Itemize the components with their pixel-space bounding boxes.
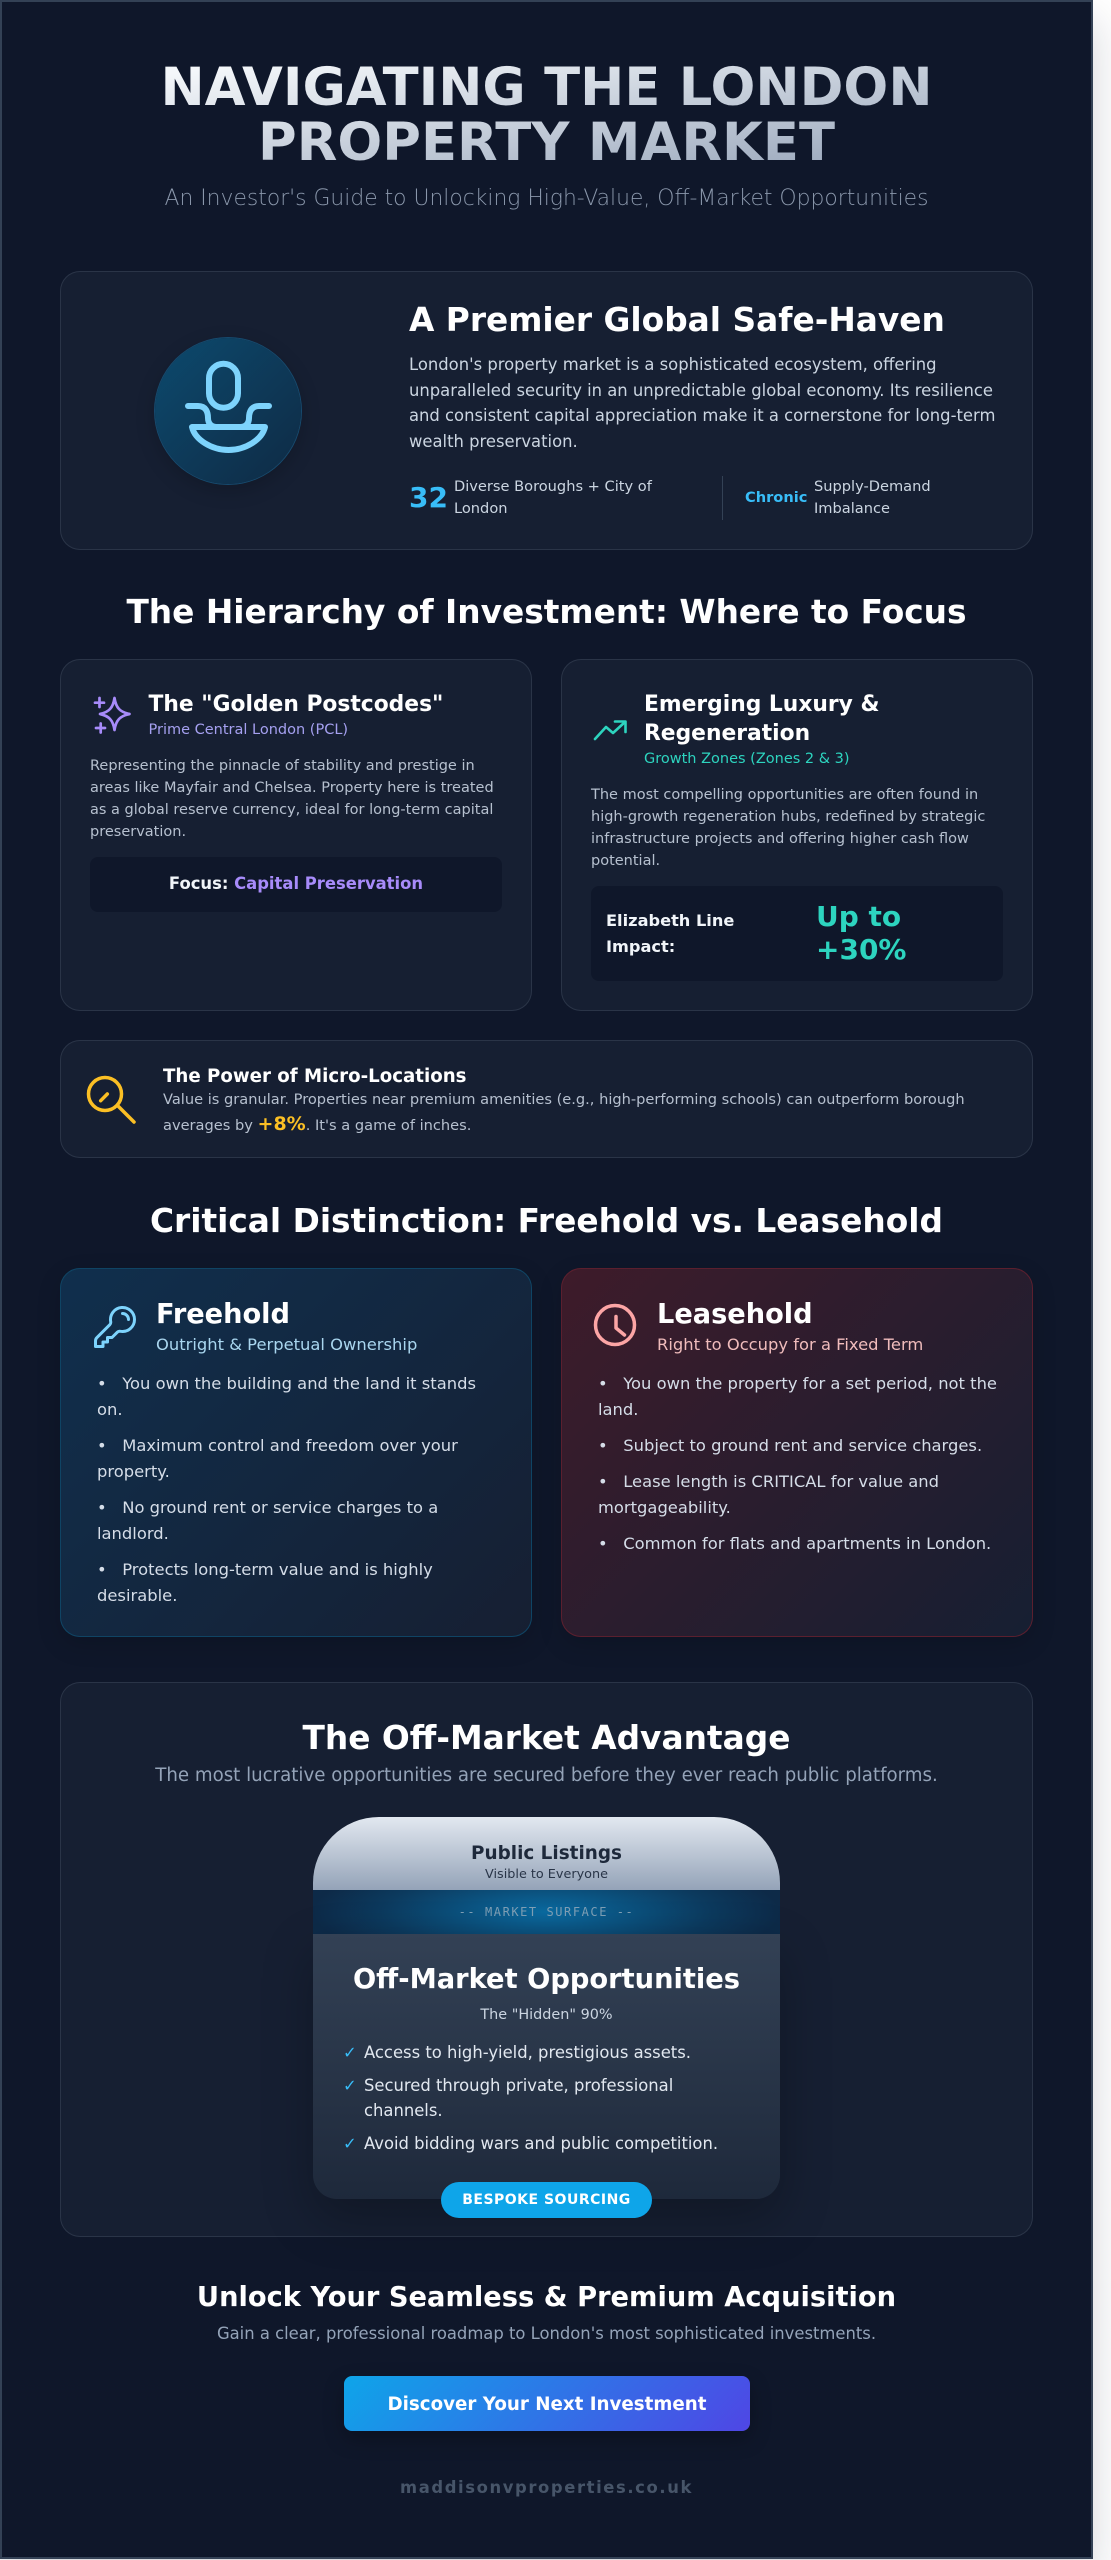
text: emerging description: The most compelling opportunities are often found in <box>591 787 978 803</box>
layer: public listings: Public Listings <box>471 1842 622 1864</box>
divider <box>722 476 723 520</box>
icon: trending up <box>594 720 627 740</box>
list: off-market benefits: ✓ <box>343 2043 357 2062</box>
stat: boroughs: 32 <box>409 481 448 514</box>
list: off-market benefits: Secured through private, professional <box>364 2076 673 2095</box>
heading: emerging luxury: Regeneration <box>644 721 810 746</box>
list: leasehold points: land. <box>598 1400 638 1419</box>
diagram: market iceberg <box>313 1817 780 2218</box>
button: discover: Discover Your Next Investment <box>388 2394 706 2415</box>
text: golden postcodes description: preservation. <box>90 824 186 840</box>
stat: boroughs: Diverse Boroughs + City of <box>454 478 652 495</box>
heading: safe haven: A Premier Global Safe-Haven <box>409 301 945 339</box>
layer: market surface: -- MARKET SURFACE -- <box>459 1905 634 1919</box>
heading: freehold vs leasehold: Critical Distinction: Freehold vs. Leasehold <box>150 1202 943 1240</box>
list: freehold points: • No ground rent or service charges to a <box>97 1498 438 1517</box>
layer: off-market opportunities <box>313 1934 780 2199</box>
badge: bespoke sourcing: BESPOKE SOURCING <box>462 2192 631 2208</box>
list: leasehold points: • Lease length is CRITICAL for value and <box>598 1472 939 1491</box>
panel: micro-locations <box>60 1040 1033 1158</box>
footer: website: maddisonvproperties.co.uk <box>400 2478 693 2497</box>
title <box>100 60 993 170</box>
list: leasehold points <box>598 1374 997 1553</box>
icon: key <box>94 1306 136 1348</box>
text: safe haven description: and consistent capital appreciation make it a cornerstone for long-term <box>409 406 995 425</box>
subtitle: An Investor's Guide to Unlocking High-Value, Off-Market Opportunities <box>164 186 928 211</box>
icon: safe haven emblem <box>154 337 302 485</box>
text: golden postcodes description: as a global reserve currency, ideal for long-term capital <box>90 802 493 818</box>
list: freehold points: on. <box>97 1400 123 1419</box>
panel: safe haven <box>60 271 1033 550</box>
heading: emerging luxury: Emerging Luxury & <box>644 692 879 716</box>
stat: chronic imbalance: Imbalance <box>814 500 890 517</box>
text: golden postcodes description <box>90 758 494 840</box>
stat: boroughs <box>409 478 652 517</box>
text: safe haven description: wealth preservation. <box>409 432 578 451</box>
text: call to action: Gain a clear, professional roadmap to London's most sophisticated investments. <box>217 2324 876 2343</box>
list: freehold points: • Protects long-term value and is highly <box>97 1560 433 1579</box>
callout: focus <box>90 857 502 912</box>
list: freehold points: landlord. <box>97 1524 169 1543</box>
list: freehold points: property. <box>97 1462 170 1481</box>
callout: focus: Focus: Capital Preservation <box>169 874 423 893</box>
badge: bespoke sourcing <box>441 2182 652 2218</box>
text: emerging description: infrastructure projects and offering higher cash flow <box>591 831 969 847</box>
list: leasehold points: • Common for flats and apartments in London. <box>598 1534 991 1553</box>
subheading: off-market advantage: The most lucrative opportunities are secured before they ever reach public platforms. <box>155 1765 938 1786</box>
heading: call to action: Unlock Your Seamless & Premium Acquisition <box>197 2282 896 2313</box>
title: NAVIGATING THE LONDON <box>160 57 932 118</box>
list: freehold points: • You own the building and the land it stands <box>97 1374 476 1393</box>
icon: sparkles <box>94 696 131 734</box>
heading: hierarchy: The Hierarchy of Investment: Where to Focus <box>126 592 967 630</box>
callout: elizabeth line impact: Impact: <box>606 937 675 956</box>
heading: off-market opportunities: Off-Market Opportunities <box>353 1964 740 1994</box>
list: off-market benefits: ✓ <box>343 2134 357 2153</box>
list: leasehold points: • Subject to ground rent and service charges. <box>598 1436 982 1455</box>
subheading: freehold: Outright & Perpetual Ownership <box>156 1334 417 1354</box>
callout: elizabeth line impact: Up to <box>816 900 901 933</box>
layer: public listings: Visible to Everyone <box>485 1866 608 1882</box>
heading: freehold: Freehold <box>156 1299 290 1330</box>
subheading: hidden 90: The "Hidden" 90% <box>480 2007 613 2023</box>
text: micro-locations description: averages by +8%. It's a game of inches. <box>163 1113 471 1135</box>
list: off-market benefits: Avoid bidding wars and public competition. <box>364 2134 718 2153</box>
panel: off-market advantage <box>60 1682 1033 2237</box>
list: off-market benefits: channels. <box>364 2101 443 2120</box>
text: emerging description: high-growth regeneration hubs, redefined by strategic <box>591 809 985 825</box>
text: golden postcodes description: Representing the pinnacle of stability and prestige in <box>90 758 475 774</box>
layer: market surface <box>313 1890 780 1934</box>
panel: emerging luxury <box>561 659 1033 1011</box>
text: micro-locations description <box>163 1091 965 1135</box>
text: safe haven description: unparalleled security in an unpredictable global economy. Its resilience <box>409 381 993 400</box>
layer: public listings <box>313 1817 780 1890</box>
panel: leasehold <box>561 1268 1033 1637</box>
icon: magnifier <box>86 1076 136 1124</box>
list: off-market benefits: Access to high-yield, prestigious assets. <box>364 2043 691 2062</box>
list: freehold points: desirable. <box>97 1586 177 1605</box>
subheading: growth zones: Growth Zones (Zones 2 & 3) <box>644 751 850 767</box>
list: off-market benefits: ✓ <box>343 2076 357 2095</box>
callout: elizabeth line impact: +30% <box>816 933 906 966</box>
icon: clock <box>594 1304 636 1346</box>
text: emerging description <box>590 787 985 869</box>
callout: elizabeth line impact <box>591 886 1003 981</box>
panel: golden postcodes <box>60 659 532 1011</box>
title: PROPERTY MARKET <box>258 112 835 173</box>
callout: elizabeth line impact: Elizabeth Line <box>606 911 734 930</box>
heading: off-market advantage: The Off-Market Advantage <box>303 1719 790 1757</box>
text: golden postcodes description: areas like Mayfair and Chelsea. Property here is treated <box>90 780 494 796</box>
heading: golden postcodes: The "Golden Postcodes" <box>148 692 443 716</box>
text: micro-locations description: Value is granular. Properties near premium amenities (e.g., high-performing schools) can outperform borough <box>163 1091 965 1108</box>
text: safe haven description <box>409 355 995 451</box>
subheading: leasehold: Right to Occupy for a Fixed Term <box>657 1334 923 1354</box>
stat: chronic imbalance <box>745 478 931 517</box>
list: leasehold points: • You own the property for a set period, not the <box>598 1374 997 1393</box>
list: freehold points <box>97 1374 476 1605</box>
subheading: prime central london: Prime Central London (PCL) <box>148 722 348 738</box>
stat: boroughs: London <box>454 500 508 517</box>
text: safe haven description: London's property market is a sophisticated ecosystem, offering <box>409 355 937 374</box>
list: off-market benefits <box>343 2043 718 2153</box>
text: emerging description: potential. <box>591 853 660 869</box>
panel: freehold <box>60 1268 532 1637</box>
heading: micro-locations: The Power of Micro-Locations <box>163 1066 466 1087</box>
button: discover <box>344 2376 750 2431</box>
list: leasehold points: mortgageability. <box>598 1498 731 1517</box>
heading: emerging luxury <box>644 692 879 746</box>
list: freehold points: • Maximum control and freedom over your <box>97 1436 458 1455</box>
stat: chronic imbalance: Supply-Demand <box>814 478 931 495</box>
heading: leasehold: Leasehold <box>657 1299 813 1330</box>
stat: chronic imbalance: Chronic <box>745 489 807 506</box>
